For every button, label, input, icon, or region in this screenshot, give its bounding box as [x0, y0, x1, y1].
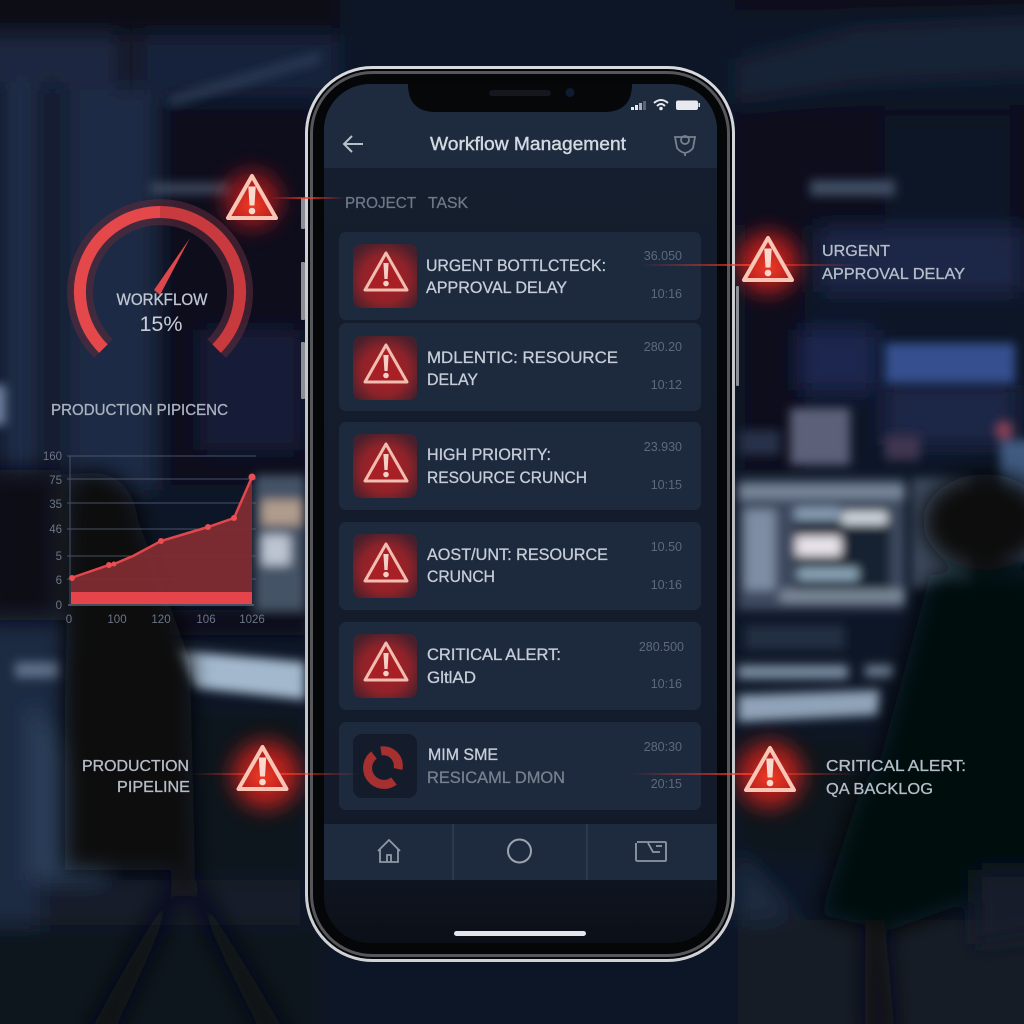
- gauge label: WORKFLOW: [116, 291, 208, 309]
- card 5: GltlAD: [427, 668, 476, 687]
- card 2: MDLENTIC: RESOURCE: [427, 348, 618, 367]
- card 6: RESICAML DMON: [427, 768, 565, 787]
- card 1: 10:16: [651, 287, 682, 301]
- tabs: PROJECT: [345, 195, 417, 212]
- alert icon: top left: [228, 176, 276, 218]
- card 4: AOST/UNT: RESOURCE: [427, 545, 608, 564]
- area chart: production pipeline: [43, 451, 265, 626]
- card 5: 280.500: [639, 640, 684, 654]
- area chart: production pipeline: 6: [56, 575, 62, 587]
- card 1: URGENT BOTTLCTECK:: [426, 256, 606, 275]
- card 3: 23.930: [644, 440, 682, 454]
- callout: urgent approval delay: URGENT: [822, 243, 890, 260]
- home icon: [378, 840, 400, 862]
- folder icon: [636, 842, 666, 861]
- phone screen: [324, 84, 717, 943]
- phone side buttons: [301, 198, 739, 399]
- card 6: MIM SME: [428, 745, 498, 764]
- area chart: production pipeline: 5: [56, 551, 62, 563]
- card 5: [339, 622, 701, 710]
- gauge value: 15%: [139, 312, 183, 336]
- chart heading: PRODUCTION PIPICENC: [51, 402, 228, 419]
- alert icon: bottom left: [238, 747, 286, 789]
- card 2: 10:12: [651, 378, 682, 392]
- callout: urgent approval delay: [822, 243, 965, 283]
- shield icon: [675, 136, 695, 156]
- icon glow: top right alert: [738, 233, 798, 293]
- area chart: production pipeline: 120: [151, 614, 171, 626]
- card 4: 10:16: [651, 578, 682, 592]
- callout: urgent approval delay: APPROVAL DELAY: [822, 266, 965, 283]
- area chart: production pipeline: 0: [66, 614, 72, 626]
- area chart: production pipeline: 1026: [239, 614, 265, 626]
- area chart: production pipeline: 106: [196, 614, 216, 626]
- notch: [408, 84, 632, 112]
- callout: production pipeline: PRODUCTION: [82, 758, 189, 775]
- area chart: production pipeline: 46: [49, 524, 62, 536]
- card 2: DELAY: [427, 370, 478, 389]
- card 3: 10:15: [651, 478, 682, 492]
- card 6: 280:30: [644, 740, 682, 754]
- gauge needle: [154, 238, 190, 295]
- card 1: APPROVAL DELAY: [426, 278, 567, 297]
- callout: critical alert qa backlog: CRITICAL ALERT:: [826, 758, 966, 775]
- back arrow: [344, 136, 363, 152]
- area chart: production pipeline: 100: [107, 614, 127, 626]
- card 5: CRITICAL ALERT:: [427, 645, 561, 664]
- card 3: HIGH PRIORITY:: [427, 445, 551, 464]
- donut icon: [368, 751, 398, 784]
- icon glow: bottom left alert: [233, 742, 299, 808]
- alert icon: top right: [744, 238, 792, 280]
- gauge: workflow: [80, 212, 240, 349]
- card 6: 20:15: [651, 777, 682, 791]
- tabs: [345, 195, 469, 212]
- area chart: production pipeline: 0: [56, 600, 62, 612]
- area chart: production pipeline: 160: [43, 451, 62, 463]
- area chart: production pipeline: 75: [49, 475, 62, 487]
- card 1: 36.050: [644, 249, 682, 263]
- phone: [306, 68, 734, 960]
- callout: critical alert qa backlog: QA BACKLOG: [826, 781, 933, 798]
- card 5: 10:16: [651, 677, 682, 691]
- flare lines: [190, 197, 860, 775]
- callout: production pipeline: PIPELINE: [117, 779, 190, 796]
- callout: production pipeline: [82, 758, 190, 796]
- card 4: CRUNCH: [427, 567, 495, 586]
- circle icon: [508, 840, 531, 862]
- header title: Workflow Management: [430, 134, 626, 154]
- card 3: RESOURCE CRUNCH: [427, 468, 587, 487]
- card 4: 10.50: [651, 540, 682, 554]
- icon glow: top left alert: [224, 172, 280, 228]
- icon glow: bottom right alert: [738, 743, 802, 807]
- callout: critical alert qa backlog: [826, 758, 966, 798]
- card 6: [339, 722, 701, 810]
- alert icon: bottom right: [746, 748, 794, 790]
- tabs: TASK: [428, 195, 469, 212]
- area chart: production pipeline: 35: [49, 499, 62, 511]
- card 2: [339, 323, 701, 411]
- home indicator: [454, 931, 586, 936]
- card 1: [339, 232, 701, 320]
- bottom navigation: [324, 824, 717, 880]
- card 2: 280.20: [644, 340, 682, 354]
- card 4: [339, 522, 701, 610]
- card 3: [339, 422, 701, 510]
- phone body: [306, 68, 734, 960]
- status icons: [631, 100, 700, 110]
- app header: [324, 84, 717, 168]
